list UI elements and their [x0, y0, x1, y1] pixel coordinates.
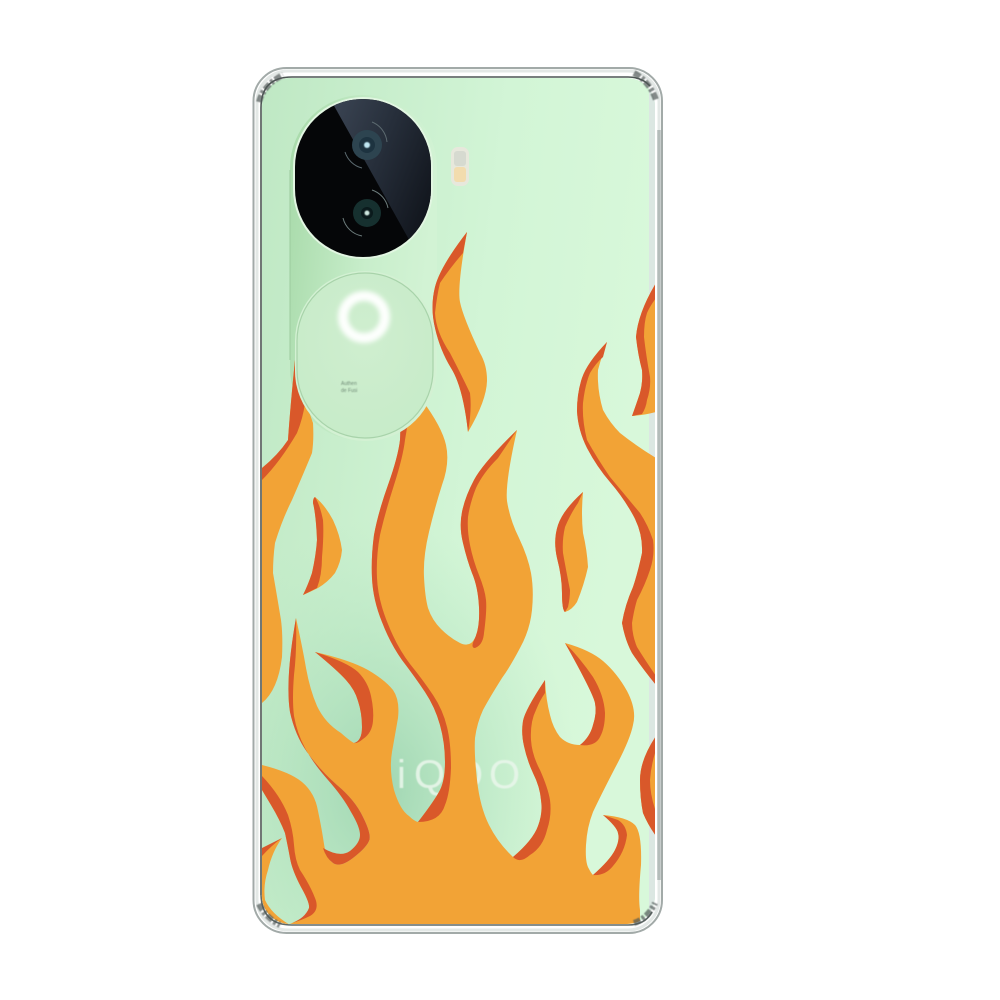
- shadow: left bottom tongue: [262, 776, 317, 923]
- red shadow strips: [262, 232, 656, 923]
- shadow: central flame: [372, 410, 451, 822]
- shadow: wedge tip: [262, 838, 282, 856]
- upper lens: [345, 122, 387, 168]
- small centre flame: [555, 492, 588, 612]
- shadow: lower right flame: [640, 736, 656, 836]
- camera lens glass: [293, 95, 440, 262]
- camera module housing: [290, 96, 364, 431]
- brand logo iQOO: Q: [414, 753, 445, 797]
- top tongue: [432, 232, 487, 432]
- top right flame: [632, 283, 656, 416]
- lower right flame: [640, 736, 656, 836]
- lower lens: [343, 190, 388, 236]
- shadow: left tongue: [288, 618, 370, 865]
- main flame body: [262, 400, 641, 924]
- shadow: small hook: [593, 815, 627, 875]
- light ring: [343, 296, 385, 338]
- right flame: [577, 342, 656, 685]
- left flame: [262, 360, 313, 703]
- flames: [262, 232, 656, 926]
- shadow: right hook: [565, 643, 605, 745]
- small disc label: Authen: [341, 381, 357, 387]
- shadow: right flame: [577, 342, 656, 685]
- shadow: left flame: [262, 360, 305, 480]
- shadow: small centre flame: [555, 492, 583, 612]
- shadow: small left flame: [303, 497, 323, 595]
- brand logo iQOO: i: [397, 753, 406, 797]
- round disc: de Fusi: [341, 388, 357, 394]
- shadow: second hook: [315, 652, 373, 743]
- phone back panel: [262, 78, 656, 940]
- flash module: [451, 147, 469, 186]
- corner bumpers: [259, 73, 656, 925]
- shadow: second tongue: [461, 430, 517, 648]
- brand logo iQOO: O: [452, 753, 483, 797]
- shadow: top tongue: [432, 232, 471, 432]
- small left flame: [303, 497, 342, 595]
- bottom-left wedge: [262, 838, 288, 924]
- shadow: third flame: [513, 680, 551, 860]
- brand logo iQOO: O: [489, 753, 520, 797]
- transparent case shell: [254, 68, 662, 933]
- round disc: [295, 271, 436, 441]
- phone case illustration: [252, 67, 663, 934]
- shadow: top right flame: [632, 283, 656, 416]
- glass reflection: [334, 99, 431, 240]
